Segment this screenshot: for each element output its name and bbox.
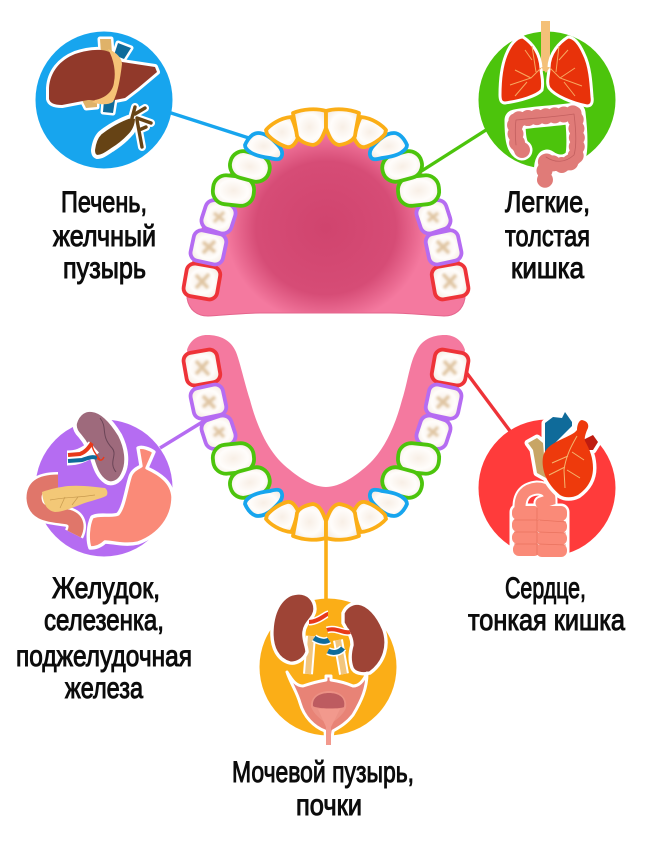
upper teeth right bbox=[326, 109, 470, 301]
icon: left kidney bbox=[272, 593, 315, 663]
label: lungs and colon: толстая bbox=[505, 220, 590, 253]
label: stomach, spleen, pancreas bbox=[16, 572, 192, 705]
label: liver and gallbladder bbox=[53, 186, 156, 285]
connector: purple line bbox=[160, 421, 204, 448]
icon: spleen bbox=[67, 410, 126, 483]
panel: liver and gallbladder bbox=[36, 32, 172, 168]
lower jaw bbox=[182, 335, 470, 540]
connector: blue line bbox=[168, 112, 252, 139]
icon: renal vessels bbox=[309, 614, 350, 652]
upper jaw bbox=[182, 109, 470, 316]
label: stomach, spleen, pancreas: поджелудочная bbox=[16, 640, 192, 673]
icon: colon bbox=[515, 113, 577, 181]
panel: heart and small intestine bbox=[478, 412, 616, 558]
icon: stomach bbox=[88, 447, 173, 548]
icon: bladder bbox=[287, 672, 367, 745]
upper teeth left bbox=[182, 109, 326, 301]
label: heart and small intestine: тонкая кишка bbox=[468, 604, 625, 637]
upper gum bbox=[187, 112, 465, 316]
label: liver and gallbladder: желчный bbox=[53, 220, 156, 253]
blue circle bbox=[36, 32, 172, 168]
icon: duodenum and pancreas bbox=[34, 482, 107, 534]
connector: red line bbox=[466, 372, 510, 431]
connector: orange line bbox=[324, 530, 328, 600]
panel: kidneys and bladder bbox=[260, 593, 396, 745]
label: stomach, spleen, pancreas: селезенка, bbox=[44, 604, 164, 637]
label: stomach, spleen, pancreas: Желудок, bbox=[52, 572, 160, 605]
icon: lungs bbox=[500, 37, 592, 106]
icon: ureters bbox=[308, 636, 344, 674]
icon: gallbladder bbox=[93, 107, 151, 157]
label: lungs and colon: Легкие, bbox=[505, 186, 590, 219]
orange circle bbox=[260, 598, 396, 736]
green circle bbox=[478, 32, 616, 168]
label: bladder and kidneys: Мочевой пузырь, bbox=[232, 756, 414, 789]
panel: stomach, spleen, pancreas bbox=[34, 410, 173, 556]
label: liver and gallbladder: пузырь bbox=[63, 252, 146, 285]
lower gum bbox=[187, 335, 465, 537]
icon: liver bbox=[49, 39, 157, 113]
panel: lungs and colon bbox=[478, 21, 616, 181]
label: lungs and colon: кишка bbox=[511, 252, 584, 285]
connector: green line bbox=[420, 130, 486, 172]
label: liver and gallbladder: Печень, bbox=[61, 186, 147, 219]
lower teeth right bbox=[326, 348, 470, 540]
label: bladder and kidneys: почки bbox=[296, 789, 362, 822]
icon: trachea bbox=[541, 21, 550, 71]
label: lungs and colon bbox=[505, 186, 590, 285]
icon: heart bbox=[528, 412, 598, 497]
label: heart and small intestine: Сердце, bbox=[505, 572, 586, 605]
icon: small intestine bbox=[511, 488, 568, 558]
label: heart and small intestine bbox=[468, 572, 625, 637]
label: bladder and kidneys bbox=[232, 756, 414, 822]
icon: right kidney bbox=[343, 603, 386, 674]
label: stomach, spleen, pancreas: железа bbox=[65, 672, 143, 705]
lower teeth left bbox=[182, 348, 326, 540]
purple circle bbox=[36, 420, 172, 556]
red circle bbox=[478, 420, 616, 556]
